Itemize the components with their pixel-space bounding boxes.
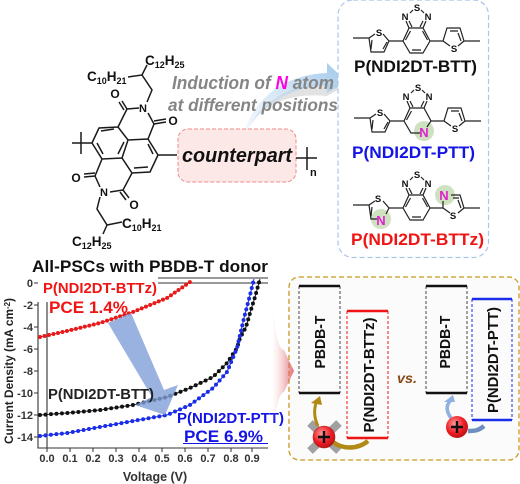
atom labels of NDI: O xyxy=(71,171,81,185)
molecule: PTT: N xyxy=(426,92,433,103)
atom labels of NDI: 25 xyxy=(102,241,112,251)
y tick labels: -10 xyxy=(17,388,33,400)
molecule: BTTz xyxy=(353,170,480,229)
label: BTT: P(NDI2DT-BTT) xyxy=(354,57,477,76)
molecule: PTT xyxy=(354,83,481,141)
atom labels of NDI: C xyxy=(72,234,82,249)
y tick labels: 0 xyxy=(27,278,33,290)
molecule: PTT: N xyxy=(403,92,410,103)
energy block: PBDB-T right xyxy=(426,286,467,393)
label: PTT: P(NDI2DT-PTT) xyxy=(352,143,475,162)
x tick labels: 0.0 xyxy=(39,453,55,465)
NDI chemical structure xyxy=(71,53,185,251)
y tick labels: -12 xyxy=(17,410,33,422)
y tick labels: -14 xyxy=(17,432,34,444)
atom labels of NDI: 21 xyxy=(117,76,127,86)
atom labels of NDI: O xyxy=(129,198,139,212)
x tick labels: 0.6 xyxy=(177,453,193,465)
atom labels of NDI xyxy=(71,53,185,251)
x tick labels: 0.1 xyxy=(62,453,78,465)
J-V chart xyxy=(2,278,284,484)
arrow: gold hole transfer blocked xyxy=(311,396,368,448)
y axis title: ) xyxy=(2,298,16,302)
energy block: PBDB-T right: PBDB-T xyxy=(438,315,454,368)
molecule: BTTz: N xyxy=(402,179,409,190)
label: PCE 6.9%: PCE 6.9% xyxy=(184,427,263,446)
atom labels of NDI: 12 xyxy=(155,60,165,70)
arrow: blue hole transfer xyxy=(444,395,484,431)
atom labels of NDI: 25 xyxy=(175,60,185,70)
vs label: vs. xyxy=(397,370,417,386)
atom labels of NDI: H xyxy=(142,216,152,231)
induction text xyxy=(168,73,338,115)
x tick labels: 0.2 xyxy=(85,453,101,465)
ticks xyxy=(34,283,252,452)
label: BTTz: P(NDI2DT-BTTz) xyxy=(43,281,157,297)
x tick labels: 0.5 xyxy=(154,453,170,465)
induction text: Induction of N atom xyxy=(172,73,334,93)
induction text: at different positions xyxy=(168,95,338,115)
counterpart box: counterpart xyxy=(182,145,293,167)
atom labels of NDI: 21 xyxy=(152,223,162,233)
axes xyxy=(38,278,268,448)
energy block: PTT: P(NDI2DT-PTT) xyxy=(486,307,502,413)
label: BTTz: P(NDI2DT-BTTz) xyxy=(351,230,484,249)
y tick labels: -4 xyxy=(23,322,34,334)
molecule: PTT: S xyxy=(452,124,458,135)
chart title: All-PSCs with PBDB-T donor xyxy=(32,257,268,276)
x axis title: Voltage (V) xyxy=(123,470,187,484)
atom labels of NDI: 10 xyxy=(97,76,107,86)
atom labels of NDI: H xyxy=(92,234,102,249)
energy block: PBDB-T left: PBDB-T xyxy=(313,315,329,368)
cross mark xyxy=(310,423,339,451)
label: PCE 1.4%: PCE 1.4% xyxy=(49,298,128,317)
curve: BTTz red xyxy=(40,282,190,337)
molecule: BTTz: S xyxy=(414,170,420,181)
energy block: BTTz xyxy=(347,311,388,438)
molecule: BTT: N xyxy=(402,12,409,23)
molecule: PTT: S xyxy=(377,108,383,119)
polymer bracket with n xyxy=(296,147,317,179)
x tick labels xyxy=(39,453,260,465)
x tick labels: 0.7 xyxy=(200,453,216,465)
energy block: PBDB-T left xyxy=(299,286,340,393)
energy block: PTT xyxy=(472,299,512,420)
y tick labels: -8 xyxy=(23,366,33,378)
molecule: BTTz: N xyxy=(425,179,432,190)
atom labels of NDI: N xyxy=(100,187,108,199)
atom labels of NDI: 12 xyxy=(82,241,92,251)
atom labels of NDI: C xyxy=(87,69,97,84)
y tick labels xyxy=(17,278,34,444)
y tick labels: -2 xyxy=(23,300,33,312)
hole icon right xyxy=(446,416,468,438)
molecule: BTTz: S xyxy=(375,194,381,205)
x tick labels: 0.4 xyxy=(131,453,148,465)
label: PTT: P(NDI2DT-PTT) xyxy=(177,410,284,427)
x tick labels: 0.9 xyxy=(244,453,260,465)
fan arrow xyxy=(273,308,294,435)
x tick labels: 0.3 xyxy=(108,453,124,465)
atom labels of NDI: O xyxy=(110,87,120,101)
molecule: BTT: N xyxy=(425,12,432,23)
hole icon left xyxy=(313,426,335,448)
molecule: BTT: S xyxy=(414,3,420,14)
molecule: BTTz: N xyxy=(376,213,386,228)
panel: energy levels xyxy=(273,277,519,460)
atom labels of NDI: C xyxy=(122,216,132,231)
molecule: BTTz: S xyxy=(450,211,456,222)
atom labels of NDI: H xyxy=(107,69,117,84)
atom labels of NDI: N xyxy=(139,103,147,115)
counterpart box xyxy=(178,129,296,182)
energy block: BTTz: P(NDI2DT-BTTz) xyxy=(362,317,378,432)
molecule: PTT: N xyxy=(419,125,429,140)
atom labels of NDI: O xyxy=(168,114,178,128)
atom labels of NDI: H xyxy=(165,53,175,68)
molecule: BTT: S xyxy=(376,28,382,39)
y axis title: -2 xyxy=(3,301,12,309)
molecule: BTT: S xyxy=(451,44,457,55)
molecule: PTT: S xyxy=(415,83,421,94)
curve: BTT black xyxy=(40,279,260,415)
label: BTT: P(NDI2DT-BTT) xyxy=(48,387,154,403)
curve: PTT blue xyxy=(40,279,254,436)
panel: acceptor polymers xyxy=(338,0,488,258)
curved arrow: induction xyxy=(243,63,347,137)
y tick labels: -6 xyxy=(23,344,33,356)
x tick labels: 0.8 xyxy=(223,453,239,465)
molecule: BTTz: N xyxy=(439,188,449,203)
molecule: BTT xyxy=(353,3,480,55)
arrow: PCE increase xyxy=(108,313,178,415)
atom labels of NDI: 10 xyxy=(132,223,142,233)
y axis title: Current Density (mA cm xyxy=(2,307,16,444)
polymer bracket with n: n xyxy=(310,167,317,179)
atom labels of NDI: C xyxy=(145,53,155,68)
